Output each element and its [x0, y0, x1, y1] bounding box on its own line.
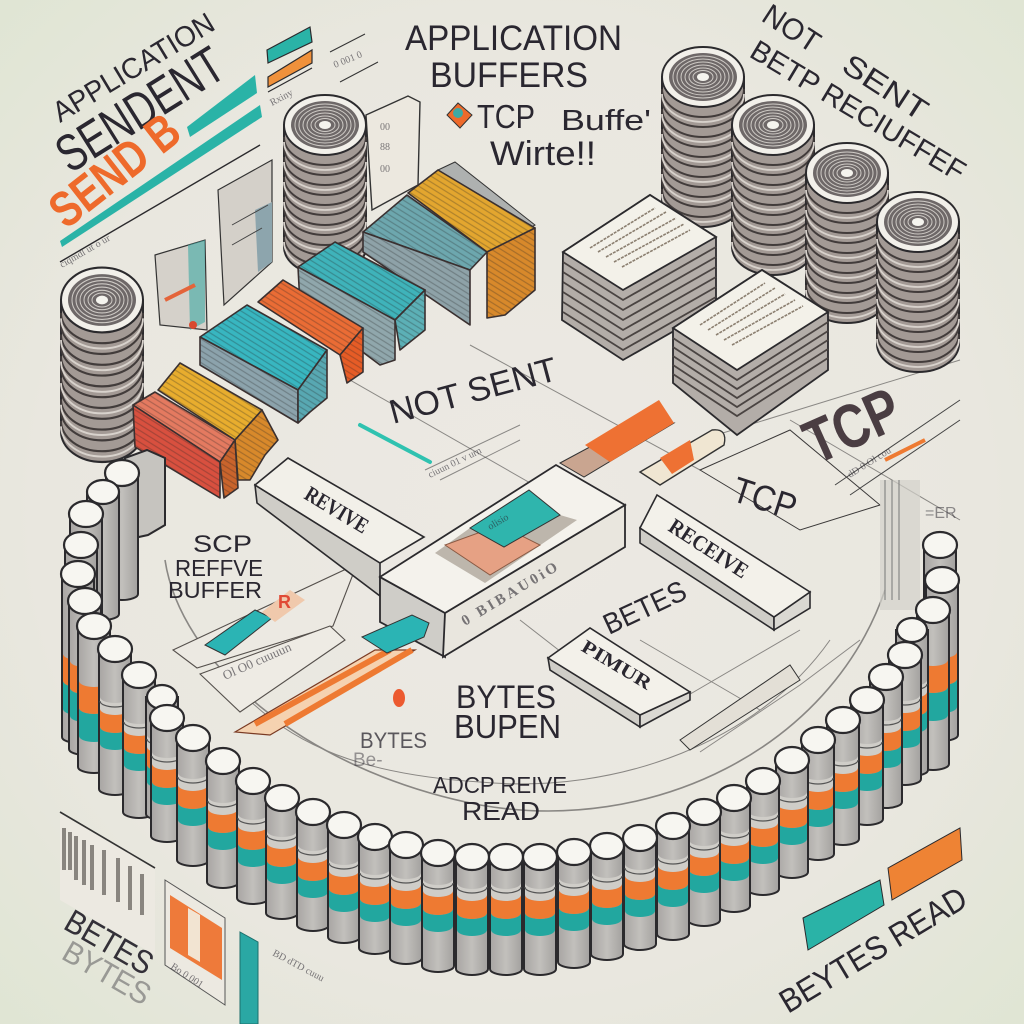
scroll — [640, 430, 725, 485]
block: red front — [133, 392, 238, 498]
label: application: APPLICATION — [47, 7, 220, 129]
text: scp reffve buffer — [168, 531, 263, 603]
disc stack right 4 — [877, 192, 959, 372]
text: betes bottom-left: BYTES — [56, 934, 157, 1012]
text: tcp buffer write: Buffe' — [561, 105, 651, 137]
box: revive: REVIVE — [300, 481, 373, 538]
paper stack 2 — [673, 270, 828, 435]
central box: 0 BIBAU0iO — [459, 558, 563, 629]
note panel with teal smear — [360, 425, 520, 481]
text: tcp buffer write: TCP — [477, 98, 535, 135]
text: scp reffve buffer: BUFFER — [168, 577, 262, 603]
teal strips — [60, 75, 262, 247]
box: receive: RECEIVE — [664, 513, 753, 583]
text: tcp large: TCP — [794, 375, 911, 478]
back box behind cylinders — [125, 450, 165, 540]
panel: scp floor cards: Ol O0 cuuuun — [220, 639, 294, 683]
label: application: APPLICATION — [405, 19, 622, 58]
text: betes bottom-left: BETES — [58, 902, 160, 982]
text: bytes buper: BUPEN — [454, 708, 561, 745]
text: tcp small: TCP — [728, 469, 802, 528]
label: sendent: SENDENT — [46, 36, 235, 184]
teal tab — [240, 932, 258, 1024]
icon: tcp badge — [447, 103, 472, 128]
central box: olisio — [486, 512, 511, 533]
panel: orange card — [165, 880, 225, 1005]
text: bytes faded — [353, 728, 427, 771]
paper stack 1 — [562, 195, 716, 360]
right back bars — [880, 480, 957, 610]
panel: scp floor cards — [173, 564, 357, 712]
block: yellow front — [158, 363, 278, 480]
disc stack top centre — [284, 95, 366, 275]
back panel behind top stack — [366, 96, 420, 210]
text: beytes read: BEYTES READ — [773, 879, 973, 1020]
text: adcp reive read — [433, 772, 567, 826]
text: bytes buper — [454, 679, 561, 745]
diagonal rail right — [680, 640, 860, 752]
floor circuit lines — [165, 345, 960, 811]
text: bytes faded: BYTES — [360, 728, 427, 753]
tcp note panel — [700, 400, 960, 530]
text: not sent centre: NOT SENT — [385, 351, 561, 432]
scribble note: 0 001 0 — [332, 49, 364, 71]
block: teal grey — [200, 305, 327, 423]
top-left window panels — [58, 145, 272, 330]
disc stack right 1 — [662, 47, 744, 227]
back panel behind top stack: 00 — [380, 164, 390, 175]
box: pimur: PIMUR — [577, 636, 655, 695]
label: buffers: BUFFERS — [430, 56, 588, 95]
text: not sent top right: NOT — [756, 0, 826, 60]
teal label — [470, 490, 560, 547]
back panel behind top stack: 88 — [380, 142, 390, 153]
text: not sent top right: BETP RECIUFFEF — [744, 35, 971, 188]
text: tcp buffer write: Wirte!! — [490, 135, 596, 173]
caption scribble: BD dTD cuuu — [271, 948, 326, 984]
block: orange — [258, 280, 363, 383]
cylinder ring — [61, 460, 959, 975]
text: bytes faded: Be- — [353, 750, 383, 771]
box: pimur — [548, 628, 690, 727]
panel: orange card: Bo 0 001 — [168, 961, 205, 990]
back panel behind top stack: 00 — [380, 122, 390, 133]
note panel with teal smear: ciuun 01 v urn — [426, 445, 483, 481]
disc stack right 3 — [806, 143, 888, 323]
text: bytes buper: BYTES — [456, 679, 556, 715]
legend swatches: Rxiny — [268, 87, 295, 109]
text: adcp reive read: ADCP REIVE — [433, 772, 567, 798]
legend swatches — [267, 27, 312, 109]
text: betes label: BETES — [598, 575, 692, 641]
disc stack right 2 — [732, 95, 814, 275]
text: scp reffve buffer: REFFVE — [175, 555, 263, 581]
top-left window panels: ciqmdl ut o ur — [58, 233, 113, 271]
scribble note — [330, 34, 378, 82]
orange wedge — [560, 400, 674, 477]
central box — [380, 465, 625, 657]
heading: application sendent — [38, 7, 262, 247]
right back bars: =ER — [925, 505, 957, 522]
bottom-right swatches — [803, 828, 962, 950]
block: yellow back — [408, 162, 535, 318]
block: teal — [298, 242, 425, 365]
disc stack left — [61, 268, 143, 462]
tcp note panel: dD 0 Ol cou — [846, 445, 893, 481]
heading: application buffers — [405, 19, 622, 95]
text: scp reffve buffer: SCP — [193, 531, 252, 558]
label: send b: SEND B — [38, 102, 191, 239]
panel: bottom-left chart card — [60, 812, 155, 955]
block: slate — [363, 195, 487, 325]
text: not sent top right: SENT — [836, 48, 934, 128]
box: receive — [640, 495, 810, 630]
colour buffer blocks — [133, 162, 535, 498]
small teal tag — [205, 590, 305, 655]
small teal tag: R — [278, 592, 291, 612]
teal tag and orange stripes — [235, 615, 429, 735]
text: adcp reive read: READ — [462, 796, 540, 826]
text: tcp buffer write — [477, 98, 651, 173]
box: revive — [255, 458, 424, 596]
red marker — [393, 689, 405, 707]
